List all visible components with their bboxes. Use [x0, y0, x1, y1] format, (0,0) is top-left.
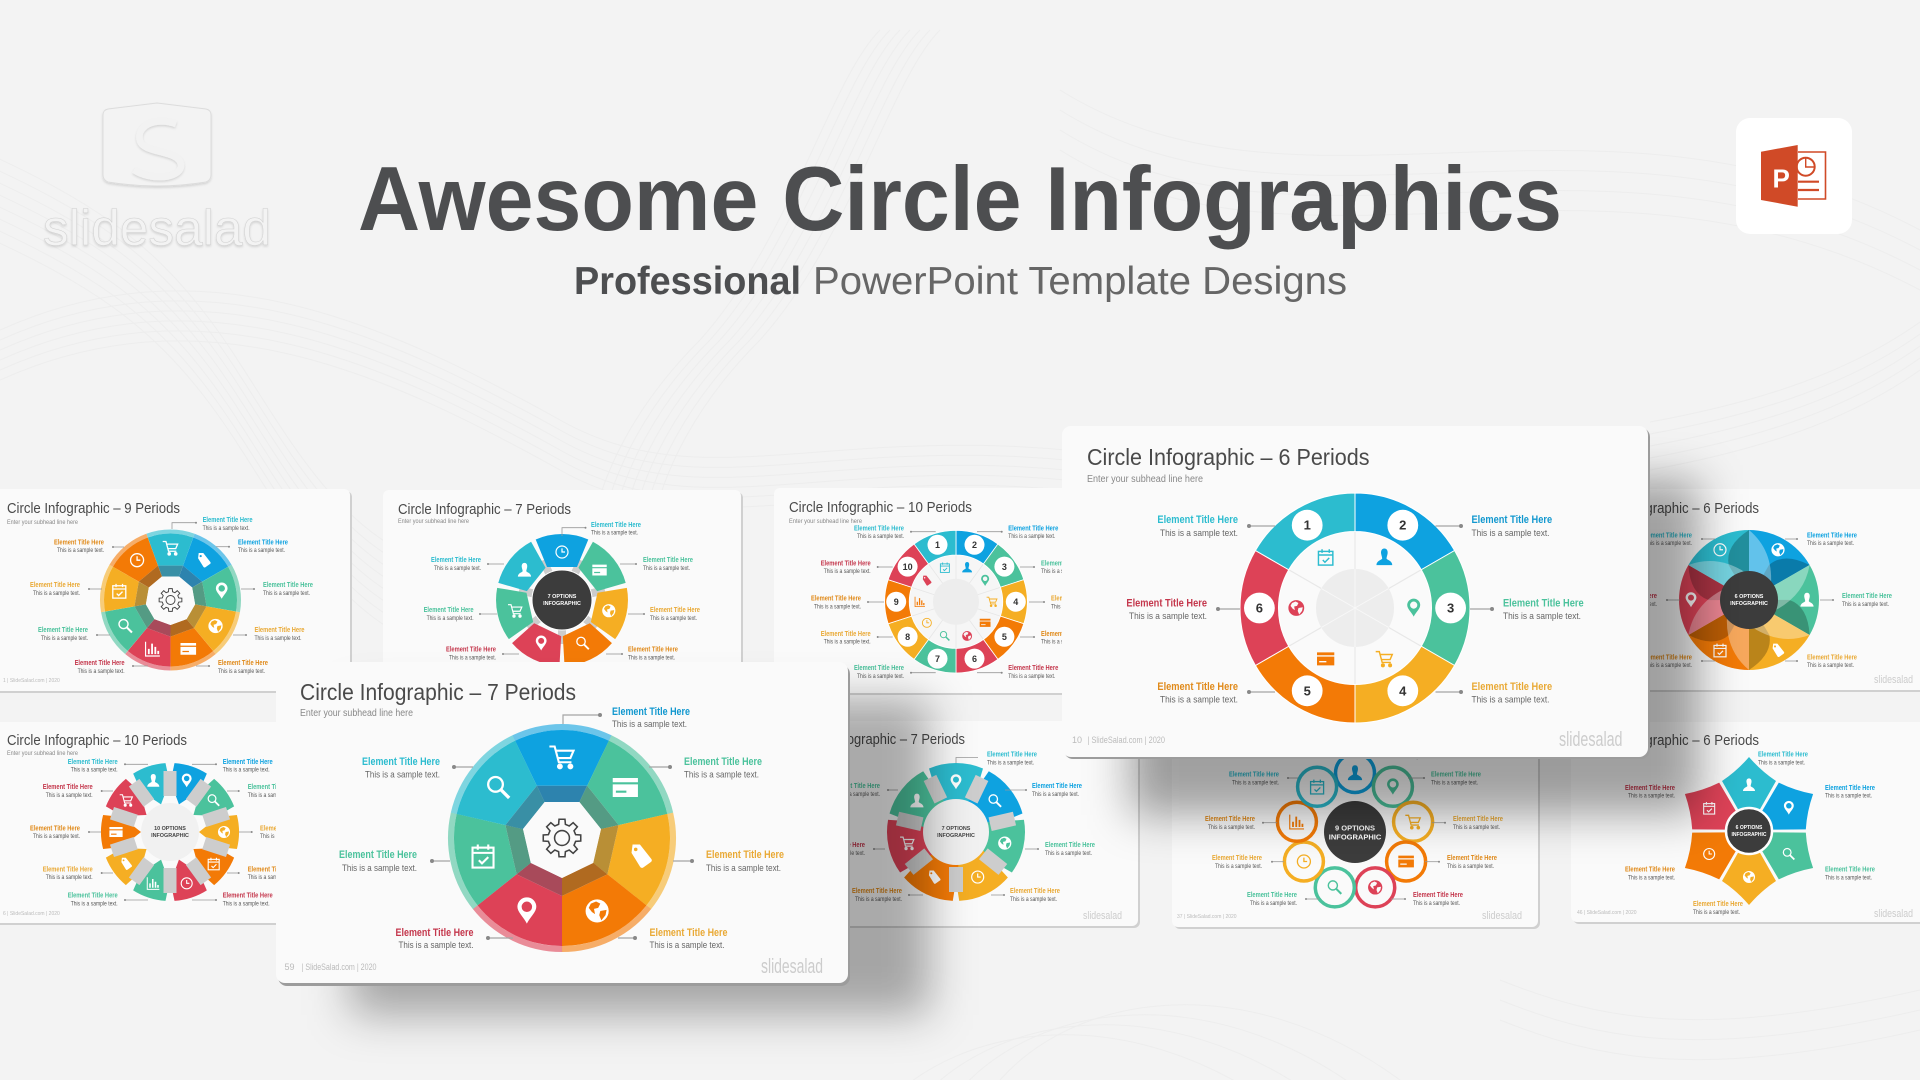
panel: feature slide 6 periods	[1062, 426, 1650, 759]
callouts: Element Title Here	[1051, 596, 1101, 603]
footer: | SlideSalad.com | 2020	[1088, 735, 1165, 745]
callouts: This is a sample text.	[1160, 695, 1238, 706]
footer wordmark: slidesalad	[1559, 729, 1622, 751]
callouts: Element Title Here	[811, 596, 861, 603]
chart: 6 period numbered ring: 6	[1256, 600, 1263, 616]
callouts: This is a sample text.	[263, 591, 310, 597]
chart: 10 period numbered ring: 8	[905, 632, 910, 642]
callouts: This is a sample text.	[1807, 541, 1854, 547]
callouts: Element Title Here	[248, 784, 298, 791]
callouts: This is a sample text.	[342, 863, 417, 874]
callouts: Element Title Here	[987, 752, 1037, 759]
callouts: This is a sample text.	[1413, 901, 1460, 907]
callouts: This is a sample text.	[1041, 640, 1088, 646]
callouts: This is a sample text.	[1628, 794, 1675, 800]
footer: 46 | SlideSalad.com | 2020	[1577, 910, 1637, 916]
callouts: Element Title Here	[38, 627, 88, 634]
callouts: This is a sample text.	[1232, 781, 1279, 787]
panel: 7 periods dark centre slide	[383, 490, 743, 694]
footer: 1 | SlideSalad.com | 2020	[3, 678, 60, 684]
callouts: This is a sample text.	[71, 768, 118, 774]
chart: 6 point star: INFOGRAPHIC	[1732, 832, 1767, 838]
callouts: Element Title Here	[1032, 783, 1082, 790]
panel: 6 periods star slide	[1571, 722, 1920, 924]
chart: 10 period numbered ring: 4	[1013, 597, 1018, 607]
callouts	[339, 706, 784, 951]
subtitle: Professional	[574, 260, 801, 303]
chart: 9 bubble ring: INFOGRAPHIC	[1329, 832, 1382, 842]
callouts: This is a sample text.	[78, 669, 125, 675]
callouts	[30, 759, 310, 908]
callouts: This is a sample text.	[643, 566, 690, 572]
shadow: behind 6 periods feature slide	[1130, 480, 1700, 815]
chart: 10 period numbered ring: 5	[1002, 632, 1007, 642]
icon: logo S	[134, 121, 181, 177]
chart: 10 period numbered ring	[875, 519, 1037, 684]
chart: 6 point star: 6 OPTIONS	[1736, 825, 1763, 831]
chart: 6 period numbered ring: 4	[1399, 683, 1407, 698]
callouts: This is a sample text.	[248, 793, 295, 799]
callouts: Element Title Here	[830, 783, 880, 790]
panel: feature slide 7 periods	[276, 662, 850, 986]
footer wordmark: slidesalad	[1482, 910, 1522, 922]
callouts: Element Title Here	[1413, 892, 1463, 899]
callouts	[1607, 533, 1892, 669]
icon: PowerPoint badge: P	[1772, 163, 1790, 193]
chart: 10 period numbered ring: 6	[972, 654, 977, 664]
callouts: This is a sample text.	[33, 591, 80, 597]
chart: 7 segments with dark centre: INFOGRAPHIC	[543, 601, 581, 607]
callouts: This is a sample text.	[706, 863, 781, 874]
chart: 10 period numbered ring: 3	[1002, 562, 1007, 572]
chart: 9 bubble ring	[1277, 754, 1433, 907]
callouts: This is a sample text.	[33, 834, 80, 840]
callouts: Element Title Here	[1431, 772, 1481, 779]
callouts: This is a sample text.	[434, 566, 481, 572]
callouts: This is a sample text.	[1503, 611, 1581, 622]
callouts: This is a sample text.	[818, 851, 865, 857]
callouts: Element Title Here	[260, 826, 310, 833]
callouts: This is a sample text.	[57, 548, 104, 554]
callouts: This is a sample text.	[1129, 611, 1207, 622]
heading: Circle Infographic – 6 Periods	[1586, 732, 1759, 749]
callouts: Element Title Here	[238, 540, 288, 546]
panel: 9 options bubble slide	[1172, 721, 1540, 929]
callouts: This is a sample text.	[1610, 602, 1657, 608]
callouts: Element Title Here	[1008, 665, 1058, 672]
callouts: Element Title Here	[1693, 901, 1743, 908]
callouts: Element Title Here	[1825, 785, 1875, 792]
callouts: Element Title Here	[1045, 842, 1095, 849]
callouts: Element Title Here	[223, 893, 273, 900]
shadow: behind 7 periods feature slide	[350, 700, 930, 1015]
callouts: This is a sample text.	[814, 605, 861, 611]
heading: Circle Infographic – 9 Periods	[7, 500, 180, 517]
callouts: This is a sample text.	[260, 834, 307, 840]
callouts: This is a sample text.	[449, 656, 496, 662]
callouts: Element Title Here	[821, 631, 871, 638]
callouts: This is a sample text.	[1628, 876, 1675, 882]
callouts: This is a sample text.	[650, 940, 724, 951]
callouts: This is a sample text.	[1472, 528, 1550, 539]
callouts: This is a sample text.	[1807, 663, 1854, 669]
subhead: Enter your subhead line here	[7, 520, 79, 526]
callouts: This is a sample text.	[1250, 901, 1297, 907]
callouts: This is a sample text.	[1431, 781, 1478, 787]
callouts: This is a sample text.	[427, 616, 474, 622]
callouts	[811, 526, 1101, 680]
subtitle: PowerPoint Template Designs	[813, 260, 1347, 303]
callouts: Element Title Here	[1212, 855, 1262, 862]
footer: 59	[284, 962, 295, 972]
callouts: This is a sample text.	[1645, 541, 1692, 547]
callouts: This is a sample text.	[1472, 695, 1550, 706]
callouts	[815, 752, 1095, 903]
callouts	[1126, 514, 1584, 706]
callouts: Element Title Here	[650, 607, 700, 614]
callouts: This is a sample text.	[254, 636, 302, 642]
callouts: This is a sample text.	[1008, 674, 1056, 680]
chart: 6 period numbered ring: 2	[1399, 518, 1406, 533]
callouts	[1625, 752, 1875, 916]
callouts: Element Title Here	[1157, 681, 1238, 693]
callouts: This is a sample text.	[1645, 663, 1692, 669]
callouts: Element Title Here	[424, 607, 474, 614]
subhead: Enter your subhead line here	[1087, 474, 1203, 485]
title: Awesome Circle Infographics	[358, 149, 1562, 250]
callouts: This is a sample text.	[398, 940, 474, 951]
callouts: Element Title Here	[431, 557, 481, 564]
callouts: This is a sample text.	[857, 534, 904, 540]
callouts: This is a sample text.	[1693, 910, 1740, 916]
callouts: Element Title Here	[203, 517, 253, 524]
callouts: Element Title Here	[1010, 888, 1060, 895]
callouts: This is a sample text.	[248, 875, 295, 881]
callouts: Element Title Here	[854, 665, 904, 672]
callouts: This is a sample text.	[1051, 605, 1098, 611]
callouts: This is a sample text.	[46, 793, 93, 799]
callouts: Element Title Here	[643, 557, 693, 564]
callouts: This is a sample text.	[71, 902, 118, 908]
chart: 6 segment petal circle: INFOGRAPHIC	[1730, 601, 1768, 607]
callouts: This is a sample text.	[684, 770, 759, 781]
callouts: This is a sample text.	[1825, 876, 1872, 882]
callouts: This is a sample text.	[238, 548, 285, 554]
callouts: Element Title Here	[852, 888, 902, 895]
callouts: This is a sample text.	[365, 770, 440, 781]
heading: Circle Infographic – 6 Periods	[1586, 500, 1759, 517]
callouts: This is a sample text.	[1160, 528, 1238, 539]
callouts: This is a sample text.	[1041, 569, 1088, 575]
callouts: Element Title Here	[30, 826, 80, 833]
panel: 6 periods petal slide	[1586, 489, 1920, 692]
callouts: Element Title Here	[706, 849, 784, 861]
heading: Circle Infographic – 7 Periods	[398, 501, 571, 518]
chart: 6 point star	[1671, 757, 1827, 905]
callouts: Element Title Here	[218, 660, 268, 667]
callouts: This is a sample text.	[591, 531, 638, 537]
callouts: This is a sample text.	[1208, 825, 1255, 831]
callouts: This is a sample text.	[628, 656, 675, 662]
callouts: This is a sample text.	[1447, 864, 1494, 870]
chart: 7 segments with dark centre: 7 OPTIONS	[548, 594, 577, 600]
callouts: This is a sample text.	[612, 719, 687, 730]
panel: 9 periods slide	[0, 489, 352, 693]
callouts: Element Title Here	[68, 759, 118, 766]
callouts: Element Title Here	[1807, 655, 1857, 662]
chart: 6 segment petal circle	[1658, 513, 1840, 687]
callouts: This is a sample text.	[833, 792, 880, 798]
footer: 6 | SlideSalad.com | 2020	[3, 911, 60, 917]
heading: Circle Infographic – 10 Periods	[7, 732, 187, 749]
chart: 7 segments with dark centre	[492, 534, 632, 671]
footer: 10	[1072, 735, 1082, 745]
chart: 10 arrow segments	[101, 761, 239, 903]
heading: Circle Infographic – 6 Periods	[1087, 444, 1370, 470]
callouts: Element Title Here	[821, 561, 871, 568]
callouts: Element Title Here	[1472, 681, 1552, 693]
chart: 10 period numbered ring: 2	[972, 540, 977, 550]
chart: 7 arrow segments: INFOGRAPHIC	[937, 833, 975, 839]
callouts: Element Title Here	[248, 867, 298, 874]
callouts: Element Title Here	[1205, 816, 1255, 823]
callouts: Element Title Here	[223, 759, 273, 766]
callouts: Element Title Here	[1472, 514, 1552, 526]
callouts: Element Title Here	[815, 842, 865, 849]
panel: 7 periods arrow slide	[780, 721, 1140, 928]
callouts: This is a sample text.	[855, 897, 902, 903]
callouts: This is a sample text.	[1215, 864, 1262, 870]
chart: 6 segment petal circle: 6 OPTIONS	[1735, 594, 1764, 600]
callouts: Element Title Here	[43, 867, 93, 874]
callouts	[30, 517, 313, 675]
callouts: Element Title Here	[54, 540, 104, 546]
callouts: This is a sample text.	[1387, 754, 1434, 760]
callouts: Element Title Here	[75, 660, 125, 667]
callouts: Element Title Here	[1642, 655, 1692, 662]
callouts: Element Title Here	[263, 582, 313, 589]
subhead: Enter your subhead line here	[300, 708, 413, 719]
callouts: Element Title Here	[854, 526, 904, 533]
callouts: Element Title Here	[1008, 526, 1058, 533]
callouts: This is a sample text.	[824, 569, 871, 575]
heading: Circle Infographic – 10 Periods	[789, 499, 972, 516]
callouts: Element Title Here	[339, 849, 417, 861]
icon: logo shield	[103, 103, 211, 186]
chart: 10 arrow segments: 10 OPTIONS	[154, 826, 186, 832]
callouts: This is a sample text.	[203, 526, 250, 532]
callouts: Element Title Here	[1625, 785, 1675, 792]
callouts: Element Title Here	[650, 927, 728, 939]
callouts: This is a sample text.	[987, 761, 1034, 767]
callouts: This is a sample text.	[824, 640, 871, 646]
footer wordmark: slidesalad	[761, 956, 823, 978]
chart: 7 arrow segments	[883, 763, 1029, 906]
logo wordmark: slidesalad	[43, 200, 271, 256]
chart: 9 segment circle	[99, 531, 242, 672]
panel: 10 periods numbered slide	[774, 488, 1134, 695]
callouts: Element Title Here	[1825, 867, 1875, 874]
callouts: Element Title Here	[1607, 593, 1657, 600]
callouts: Element Title Here	[591, 522, 641, 529]
callouts	[424, 522, 700, 662]
callouts: Element Title Here	[396, 927, 474, 939]
callouts: Element Title Here	[1041, 561, 1091, 568]
callouts: This is a sample text.	[223, 902, 270, 908]
callouts: This is a sample text.	[1842, 602, 1889, 608]
callouts: This is a sample text.	[41, 636, 88, 642]
chart: 7 segment circle	[443, 727, 681, 959]
callouts: Element Title Here	[1041, 631, 1091, 638]
callouts	[1205, 754, 1503, 907]
callouts: Element Title Here	[1503, 598, 1584, 610]
callouts: This is a sample text.	[857, 674, 904, 680]
callouts: Element Title Here	[43, 784, 93, 791]
callouts: Element Title Here	[1229, 772, 1279, 779]
callouts: Element Title Here	[612, 706, 690, 718]
logo: slidesalad	[43, 103, 271, 256]
chart: 6 period numbered ring: 1	[1304, 518, 1311, 533]
callouts: Element Title Here	[1642, 533, 1692, 540]
callouts: This is a sample text.	[1825, 794, 1872, 800]
callouts: Element Title Here	[1447, 855, 1497, 862]
panel: 10 periods arrow slide	[0, 722, 352, 925]
footer wordmark: slidesalad	[1083, 910, 1122, 922]
callouts: Element Title Here	[362, 756, 440, 768]
chart: 6 period numbered ring: 3	[1447, 600, 1454, 616]
subhead: Enter your subhead line here	[398, 519, 470, 525]
heading: Circle Infographic – 7 Periods	[796, 731, 965, 748]
callouts: This is a sample text.	[218, 669, 265, 675]
chart: 6 period numbered ring: 5	[1304, 683, 1311, 698]
callouts: This is a sample text.	[223, 768, 270, 774]
footer: 37 | SlideSalad.com | 2020	[1177, 914, 1237, 920]
callouts: Element Title Here	[628, 647, 678, 654]
callouts: Element Title Here	[1157, 514, 1238, 526]
callouts: Element Title Here	[1126, 598, 1207, 610]
callouts: This is a sample text.	[1758, 761, 1805, 767]
callouts: This is a sample text.	[1453, 825, 1500, 831]
callouts: This is a sample text.	[46, 875, 93, 881]
callouts: Element Title Here	[684, 756, 762, 768]
callouts: This is a sample text.	[650, 616, 697, 622]
callouts: Element Title Here	[1625, 867, 1675, 874]
callouts: Element Title Here	[1842, 593, 1892, 600]
callouts: This is a sample text.	[1045, 851, 1092, 857]
callouts: This is a sample text.	[1008, 534, 1056, 540]
callouts: Element Title Here	[446, 647, 496, 654]
callouts: Element Title Here	[68, 893, 118, 900]
callouts: Element Title Here	[1453, 816, 1503, 823]
subhead: Enter your subhead line here	[7, 751, 79, 757]
heading: Circle Infographic – 7 Periods	[300, 679, 576, 705]
icon: PowerPoint badge	[1736, 118, 1852, 234]
chart: 10 period numbered ring: 7	[935, 654, 940, 664]
callouts: Element Title Here	[254, 627, 305, 634]
subhead: Enter your subhead line here	[789, 519, 863, 525]
callouts: Element Title Here	[30, 582, 80, 589]
chart: 10 period numbered ring: 1	[935, 540, 940, 550]
callouts: Element Title Here	[1807, 533, 1857, 540]
chart: 10 period numbered ring: 10	[903, 562, 913, 572]
chart: 9 bubble ring: 9 OPTIONS	[1335, 824, 1375, 832]
chart: 7 arrow segments: 7 OPTIONS	[942, 826, 971, 832]
chart: 10 arrow segments: INFOGRAPHIC	[151, 833, 189, 839]
callouts: Element Title Here	[1758, 752, 1808, 759]
callouts: Element Title Here	[1247, 892, 1297, 899]
callouts: This is a sample text.	[1010, 897, 1057, 903]
footer: | SlideSalad.com | 2020	[302, 962, 376, 972]
callouts: This is a sample text.	[1032, 792, 1079, 798]
chart: 10 period numbered ring: 9	[894, 597, 899, 607]
chart: 6 period numbered ring	[1206, 464, 1504, 752]
